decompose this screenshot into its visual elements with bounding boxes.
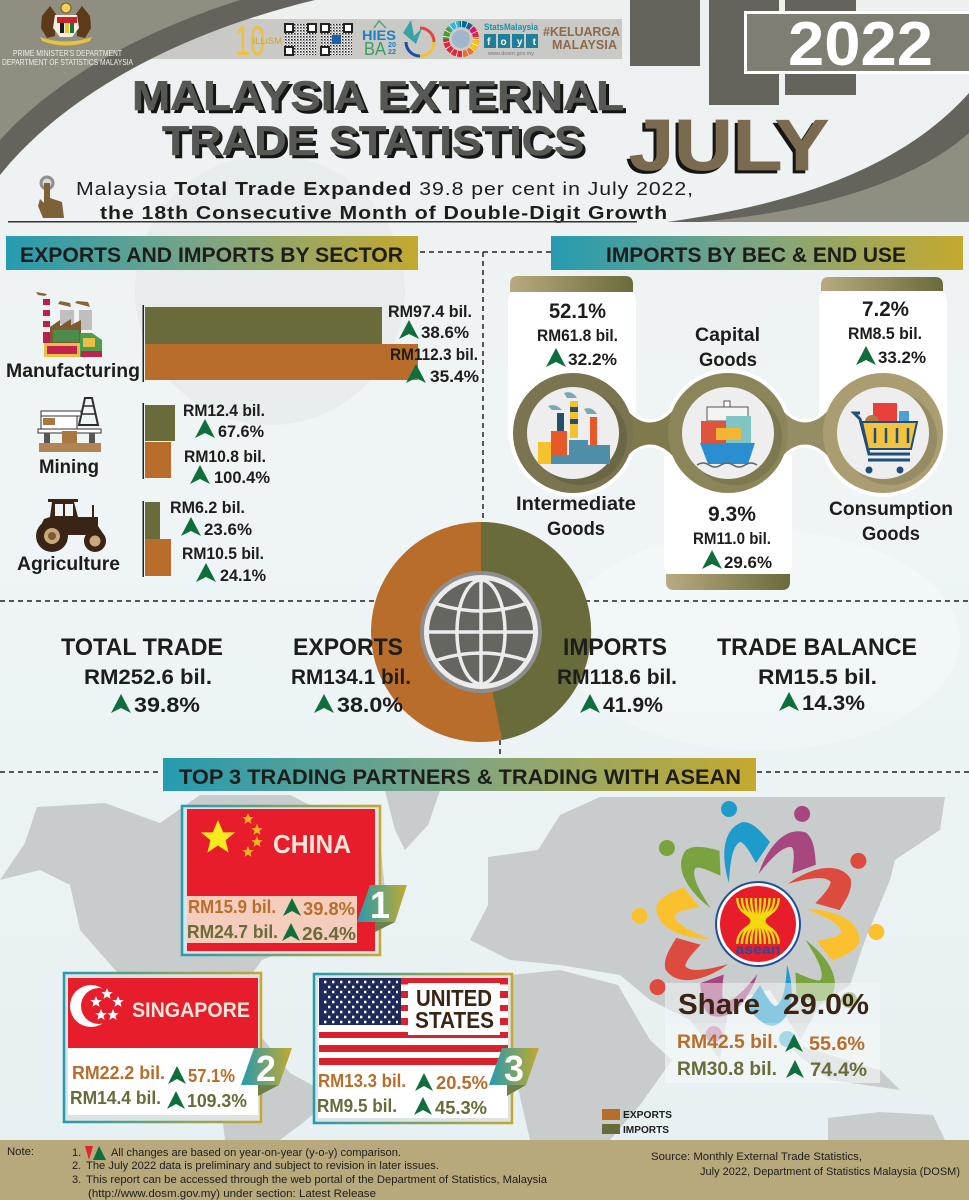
stat: total trade: 39.8% xyxy=(134,694,200,717)
bar: exports xyxy=(145,539,171,576)
axis xyxy=(142,501,144,577)
label: consumption goods xyxy=(829,498,953,545)
panel: united states xyxy=(314,974,539,1123)
country name: CHINA xyxy=(273,829,351,859)
value: exports xyxy=(184,448,270,487)
values xyxy=(677,1031,867,1081)
values: 45.3% xyxy=(435,1098,487,1118)
stat: total trade: TOTAL TRADE xyxy=(61,634,223,661)
logo: stats malaysia social: www.dosm.gov.my xyxy=(487,51,534,57)
label: intermediate goods: Intermediate xyxy=(516,493,636,515)
stat: trade balance xyxy=(717,634,917,715)
footer notes: (http://www.dosm.gov.my) under section: Latest Release xyxy=(88,1188,376,1200)
icon: intermediate goods factory xyxy=(538,392,610,464)
logo: hies ba: HIES xyxy=(362,27,396,43)
logo: keluarga malaysia: MALAYSIA xyxy=(552,38,617,52)
value: imports: 67.6% xyxy=(218,423,264,441)
values: capital goods xyxy=(693,502,772,572)
share xyxy=(678,989,869,1021)
heading: top 3 trading partners: TOP 3 TRADING PARTNERS & TRADING WITH ASEAN xyxy=(179,765,741,789)
footer notes: Note: xyxy=(7,1146,34,1158)
country name: UNITED xyxy=(416,985,492,1011)
card frame xyxy=(64,973,261,1122)
values: consumption goods: RM8.5 bil. xyxy=(848,325,922,343)
heading: imports by bec and end use: IMPORTS BY BEC & END USE xyxy=(606,243,906,267)
source: Source: Monthly External Trade Statistics, xyxy=(651,1151,862,1163)
world map background xyxy=(0,791,945,1140)
heading: exports and imports by sector: EXPORTS AND IMPORTS BY SECTOR xyxy=(20,243,403,267)
row: manufacturing xyxy=(6,292,479,386)
values: RM42.5 bil. xyxy=(677,1031,778,1053)
value: imports: 38.6% xyxy=(421,324,469,342)
logo strip background xyxy=(100,19,622,59)
value: imports: 23.6% xyxy=(204,521,252,539)
value: exports: RM112.3 bil. xyxy=(390,346,478,364)
logo: 10 years: iLLiSM xyxy=(253,36,282,46)
values: RM22.2 bil. xyxy=(72,1063,165,1083)
value panel: RM15.9 bil. xyxy=(188,897,276,917)
panel: singapore xyxy=(64,973,292,1122)
heading: imports by bec and end use xyxy=(551,236,963,270)
rank badge 3: 3 xyxy=(504,1048,524,1089)
icon: globe xyxy=(420,571,542,693)
emblem xyxy=(715,881,801,967)
values xyxy=(70,1063,247,1111)
bar: imports xyxy=(145,502,160,539)
rank badge 3 xyxy=(489,1048,539,1096)
icon: consumption goods cart xyxy=(854,403,917,474)
panel: china xyxy=(182,806,407,955)
footer notes: The July 2022 data is preliminary and subject to revision in later issues. xyxy=(86,1160,439,1172)
card caps xyxy=(510,276,943,590)
logo: stats malaysia social: StatsMalaysia xyxy=(484,22,539,32)
values: capital goods: RM11.0 bil. xyxy=(693,530,771,548)
panel: asean xyxy=(630,801,886,1083)
footer notes xyxy=(7,1146,548,1200)
legend xyxy=(602,1109,672,1136)
logo: stats malaysia social: f o y t xyxy=(487,37,537,48)
label: intermediate goods xyxy=(516,493,636,540)
value: exports: 24.1% xyxy=(220,567,266,585)
logo strip xyxy=(235,17,620,64)
values: intermediate goods: RM61.8 bil. xyxy=(537,327,618,345)
asean logo xyxy=(630,801,886,1047)
icon: tractor xyxy=(36,499,106,552)
value: imports xyxy=(170,499,252,539)
logo: keluarga malaysia xyxy=(543,25,620,52)
footer notes: 2. xyxy=(72,1160,81,1172)
country name: STATES xyxy=(415,1007,494,1033)
bar: imports xyxy=(145,307,382,344)
dashed dividers xyxy=(0,252,969,772)
rank badge 1: 1 xyxy=(370,885,390,927)
label: capital goods: Goods xyxy=(699,349,757,371)
panel: sector bars xyxy=(6,292,479,585)
logo: hies ba: 20 xyxy=(388,42,396,49)
value panel: RM24.7 bil. xyxy=(187,922,278,942)
legend: IMPORTS xyxy=(623,1124,669,1136)
share: Share xyxy=(678,989,760,1021)
card frame xyxy=(182,806,380,955)
value panel: 26.4% xyxy=(302,924,356,944)
value background xyxy=(68,1048,258,1115)
stat: imports xyxy=(557,634,677,717)
values: consumption goods: 7.2% xyxy=(862,297,909,321)
values: intermediate goods: 52.1% xyxy=(549,299,606,323)
value: exports xyxy=(182,545,266,585)
label: mining: Mining xyxy=(39,456,99,478)
value: exports xyxy=(390,346,479,386)
share: 29.0% xyxy=(783,989,869,1021)
values: consumption goods: 33.2% xyxy=(878,349,926,367)
emblem: asean xyxy=(736,941,780,957)
value panel: 39.8% xyxy=(303,899,355,919)
legend: EXPORTS xyxy=(623,1109,672,1121)
decorative blocks top right xyxy=(630,0,856,105)
donut chart: exports and imports share xyxy=(371,522,591,742)
logo: census circle xyxy=(403,20,434,56)
value: exports: RM10.5 bil. xyxy=(182,545,264,563)
year box: 2022 xyxy=(788,10,933,79)
logo: 10 years: 10 xyxy=(235,17,265,64)
label: manufacturing: Manufacturing xyxy=(6,360,140,382)
values: 109.3% xyxy=(187,1091,247,1111)
rank badge 2 xyxy=(241,1048,292,1096)
label: capital goods: Capital xyxy=(695,324,760,346)
department name: DEPARTMENT OF STATISTICS MALAYSIA xyxy=(2,58,134,67)
chain connector xyxy=(509,369,947,497)
flag xyxy=(187,809,375,951)
year box xyxy=(746,10,969,79)
country name: SINGAPORE xyxy=(132,999,250,1022)
logo: hies ba: BA xyxy=(364,39,386,59)
stat: imports: 41.9% xyxy=(603,694,663,717)
values: 20.5% xyxy=(436,1073,488,1093)
values: 57.1% xyxy=(188,1066,235,1086)
subtitle underline xyxy=(8,221,637,222)
value: imports xyxy=(388,303,472,342)
figures xyxy=(630,801,886,1047)
icon: malaysia coat of arms xyxy=(40,3,92,46)
label: consumption goods: Consumption xyxy=(829,498,953,520)
subtitle xyxy=(76,179,694,223)
logo: sdg wheel xyxy=(446,24,476,54)
title xyxy=(132,72,624,164)
label: capital goods xyxy=(695,324,760,371)
title: TRADE STATISTICS xyxy=(162,117,584,164)
rank badge 1 xyxy=(357,885,407,932)
card frame xyxy=(314,974,512,1123)
footer notes: 1. xyxy=(72,1147,81,1159)
bar: exports xyxy=(145,442,171,478)
icon: oil platform xyxy=(38,398,101,452)
values: 74.4% xyxy=(810,1059,867,1081)
footer notes: This report can be accessed through the web portal of the Department of Statistics, Malaysia xyxy=(86,1174,548,1186)
stat: trade balance: TRADE BALANCE xyxy=(717,634,917,661)
footer notes: 3. xyxy=(72,1174,81,1186)
icon: tapping hand xyxy=(38,177,64,218)
country name xyxy=(408,983,500,1035)
translucent overlay xyxy=(665,983,880,1083)
values: RM9.5 bil. xyxy=(317,1096,397,1116)
values: consumption goods xyxy=(848,297,926,367)
row: agriculture xyxy=(17,499,266,585)
values: capital goods: 9.3% xyxy=(708,502,756,526)
values xyxy=(317,1071,488,1118)
stat: trade balance: 14.3% xyxy=(802,692,865,715)
flag xyxy=(319,978,508,1065)
stat: imports: RM118.6 bil. xyxy=(557,666,677,689)
stat: total trade: RM252.6 bil. xyxy=(84,666,212,689)
source: July 2022, Department of Statistics Malaysia (DOSM) xyxy=(700,1166,960,1178)
value: imports: RM97.4 bil. xyxy=(388,303,472,321)
footer band xyxy=(0,1140,969,1200)
logo: hies ba xyxy=(362,21,396,59)
logo: hies ba: 22 xyxy=(388,49,396,56)
month: july: JULY xyxy=(629,106,829,186)
footer notes: All changes are based on year-on-year (y-o-y) comparison. xyxy=(111,1147,401,1159)
header swoosh bottom right xyxy=(667,93,969,222)
stat: imports: IMPORTS xyxy=(563,634,667,661)
stat: exports: EXPORTS xyxy=(293,634,403,661)
card backgrounds xyxy=(508,284,947,582)
stat: total trade xyxy=(61,634,223,717)
value: imports: RM12.4 bil. xyxy=(183,402,265,420)
heading: exports and imports by sector xyxy=(6,236,418,270)
label: agriculture: Agriculture xyxy=(17,553,120,575)
values: 55.6% xyxy=(809,1033,865,1055)
icon: change arrows xyxy=(85,1146,106,1160)
stat: exports: RM134.1 bil. xyxy=(291,666,411,689)
values: intermediate goods: 32.2% xyxy=(568,351,617,369)
department name: PRIME MINISTER'S DEPARTMENT xyxy=(13,49,122,58)
bar: exports xyxy=(145,344,418,380)
bar: imports xyxy=(145,405,175,441)
rank badge 2: 2 xyxy=(256,1048,276,1089)
value: exports: 100.4% xyxy=(214,469,270,487)
value: imports: RM6.2 bil. xyxy=(170,499,245,517)
value background xyxy=(318,978,508,1118)
values: RM13.3 bil. xyxy=(318,1071,406,1091)
axis xyxy=(142,305,144,382)
value: exports: 35.4% xyxy=(430,368,479,386)
logo: stats malaysia social xyxy=(484,22,539,57)
values: intermediate goods xyxy=(537,299,618,369)
axis xyxy=(142,403,144,479)
label: consumption goods: Goods xyxy=(862,523,920,545)
value: imports xyxy=(183,402,265,441)
icon: factory xyxy=(36,292,102,357)
values: RM30.8 bil. xyxy=(677,1058,777,1080)
stat: exports xyxy=(291,634,411,717)
qr codes xyxy=(285,24,352,55)
heading: top 3 trading partners xyxy=(163,758,756,791)
label: intermediate goods: Goods xyxy=(547,518,605,540)
subtitle: Malaysia Total Trade Expanded 39.8 per cent in July 2022, xyxy=(76,179,694,199)
logo: keluarga malaysia: #KELUARGA xyxy=(543,25,620,39)
icon: capital goods ship xyxy=(697,401,757,467)
stat: trade balance: RM15.5 bil. xyxy=(758,666,877,689)
row: mining xyxy=(38,398,270,487)
title: MALAYSIA EXTERNAL xyxy=(132,72,624,119)
department name xyxy=(2,49,134,67)
value panel xyxy=(187,896,357,944)
subtitle: the 18th Consecutive Month of Double-Digit Growth xyxy=(100,203,668,223)
stat: exports: 38.0% xyxy=(337,694,403,717)
flag xyxy=(68,978,258,1048)
value: exports: RM10.8 bil. xyxy=(184,448,266,466)
source xyxy=(651,1151,960,1178)
header swoosh top left xyxy=(0,0,315,175)
values: capital goods: 29.6% xyxy=(724,554,772,572)
values: RM14.4 bil. xyxy=(70,1088,161,1108)
panel: imports by end use xyxy=(508,276,953,590)
